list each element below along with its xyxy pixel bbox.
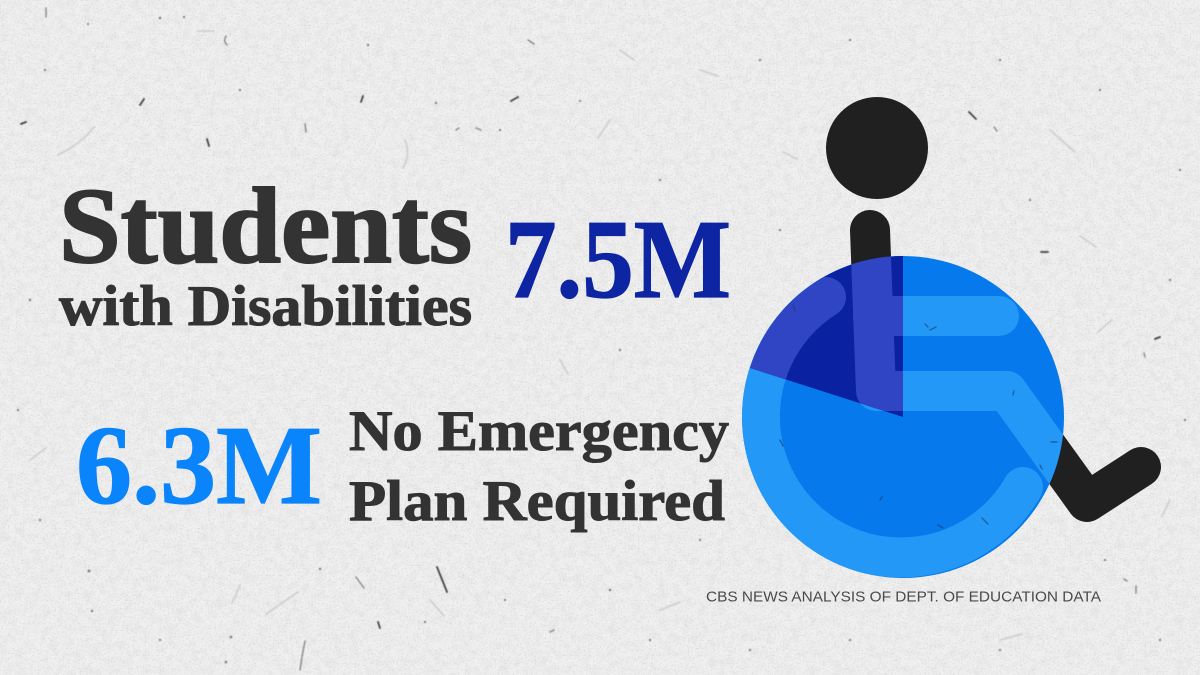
pie wedge: dark segment [750, 256, 903, 417]
stat: 6.3M: 6.3M [76, 404, 322, 528]
label: No Emergency Plan Required [349, 400, 729, 533]
heading: Students with Disabilities [59, 167, 472, 338]
label: No Emergency Plan Required: No Emergency [349, 400, 729, 463]
heading: Students with Disabilities: Students [59, 167, 472, 286]
label: No Emergency Plan Required: Plan Required [349, 470, 725, 533]
stat: 7.5M: 7.5M [505, 198, 731, 322]
icon: wheelchair user with pie chart [742, 97, 1141, 578]
icon overlay: wheelchair on light pie segment [760, 297, 1087, 557]
pie chart: total students [742, 256, 1064, 578]
heading: Students with Disabilities: with Disabilities [59, 275, 472, 338]
icon: body and leg [870, 230, 1141, 502]
source credit: CBS NEWS ANALYSIS OF DEPT. OF EDUCATION DATA [706, 590, 1101, 606]
icon overlay: wheelchair on dark wedge [750, 256, 903, 411]
paper specks on pie [780, 305, 1057, 528]
icon: head [826, 97, 928, 199]
